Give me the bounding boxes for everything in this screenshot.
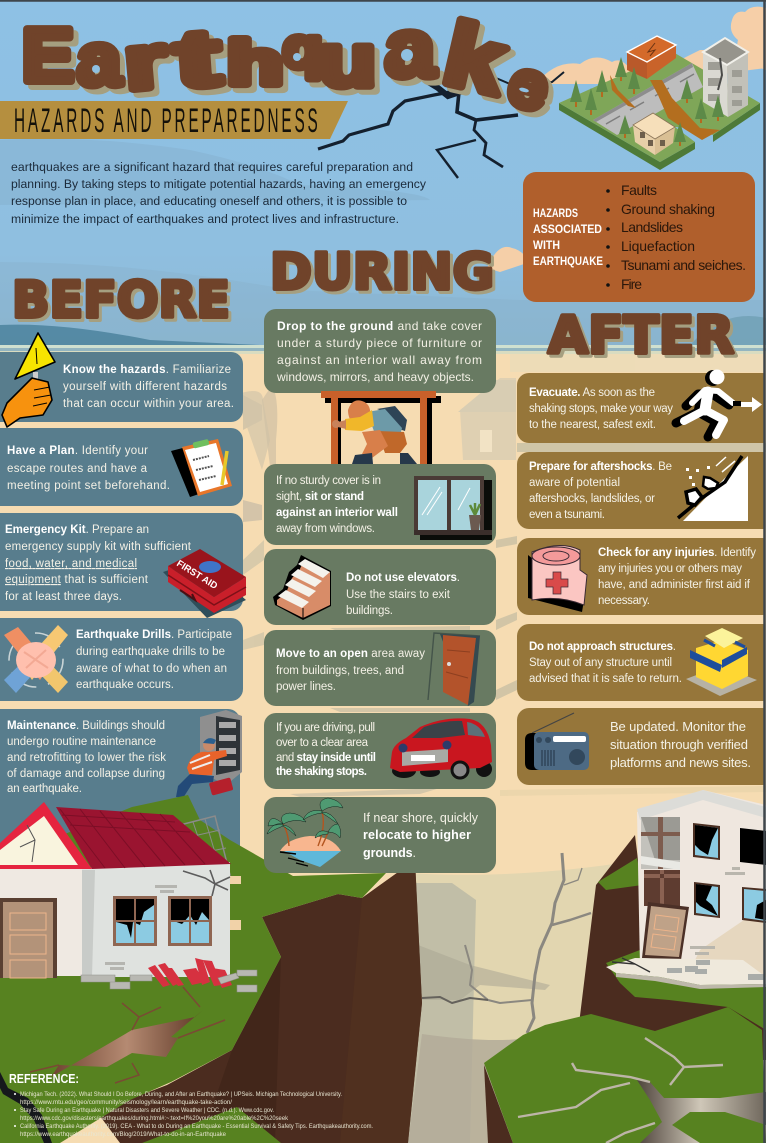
panel: earthquake drills [0, 618, 243, 701]
panel: check for any injuries: have, and administer first aid if [598, 579, 751, 591]
panel: emergency kit: food, water, and medical [5, 558, 137, 570]
heading: after: AFTER [548, 306, 734, 366]
icon: isometric earthquake city [559, 36, 760, 170]
broken windows [693, 823, 766, 923]
title letter counters [92, 49, 529, 93]
icon: yellow isometric building [686, 628, 757, 696]
canyon wall [405, 860, 640, 1143]
panel: be updated: situation through verified [610, 737, 748, 752]
green mound right [484, 1007, 766, 1143]
hazard list [606, 182, 746, 292]
panel: if you are driving [264, 713, 496, 789]
heading: Earthquake title: h [227, 29, 283, 98]
panel: if you are driving: and stay inside until [276, 752, 376, 764]
panel: if you are driving: the shaking stops. [276, 766, 367, 778]
heading: Earthquake title: a [77, 18, 122, 101]
trees [575, 75, 719, 146]
panel: prepare for aftershocks: Prepare for aftershocks. Be [529, 461, 672, 473]
right upper green [598, 858, 642, 890]
left brown cliff [97, 860, 422, 1143]
hazard list: Faults [621, 182, 657, 198]
heading: Earthquake title: u [319, 19, 376, 102]
panel: sit or stand against an interior wall [264, 464, 496, 545]
panel: hazards associated with earthquake: ASSOCIATED [533, 224, 602, 236]
panel: have a plan: Have a Plan. Identify your [7, 445, 148, 457]
wall cracks [183, 870, 230, 896]
panel: have a plan: escape routes and have a [7, 463, 148, 475]
icon: bandage roll [528, 545, 587, 612]
reference list: https://www.mtu.edu/geo/community/seismology/learn/earthquake-take-action/ [20, 1100, 232, 1106]
icon: clipboard checklist [171, 439, 232, 497]
roof [56, 807, 231, 869]
icon: staircase [273, 555, 331, 620]
panel: before - maintenance [0, 709, 242, 859]
panel: move to an open area: from buildings, trees, and [276, 665, 404, 677]
icon: first aid kit: FIRST AID [174, 558, 219, 592]
reference list: Stay Safe During an Earthquake | Natural Disasters and Severe Weather | CDC. (n.d.). Www.cdc.gov. [20, 1108, 274, 1114]
panel: know the hazards: that can occur within your area. [63, 398, 234, 410]
panel: emergency kit: emergency supply kit with sufficient [5, 541, 192, 553]
panel: if you are driving: If you are driving, pull [276, 722, 375, 734]
panel: earthquake drills: during earthquake drills to be [76, 646, 225, 658]
icon: person under table [321, 391, 441, 464]
panel: evacuate: Evacuate. As soon as the [529, 387, 655, 399]
hazard list: Ground shaking [621, 201, 715, 217]
icon: red car [390, 718, 492, 778]
panel: earthquake drills: earthquake occurs. [76, 679, 174, 691]
panel: check for any injuries: necessary. [598, 595, 650, 607]
panel: emergency kit [0, 513, 246, 618]
background: sky, clouds and horizon [0, 0, 766, 874]
hazard list: Tsunami and seiches. [621, 257, 746, 273]
panel: sit or stand against an interior wall: If no sturdy cover is in [276, 475, 381, 487]
panel: do not approach structures: Do not approach structures. [529, 641, 676, 653]
panel: evacuate: shaking stops, make your way [529, 403, 673, 415]
panel: drop to the ground: windows, mirrors, and heavy objects. [276, 370, 474, 384]
panel: have a plan: meeting point set beforehand. [7, 480, 170, 492]
icon: window [414, 476, 492, 540]
panel: do not use elevators: Use the stairs to exit [346, 589, 451, 601]
lower green patch [142, 1107, 281, 1143]
panel: do not approach structures: Stay out of any structure until [529, 657, 672, 669]
bricks [81, 970, 257, 992]
panel: know the hazards: Know the hazards. Familiarize [63, 364, 231, 376]
panel: before - maintenance: an earthquake. [7, 783, 82, 795]
panel: sit or stand against an interior wall: against an interior wall [276, 507, 398, 519]
reference list [14, 1092, 373, 1138]
ground crack left [30, 987, 225, 1083]
icon: warning sign in hand [2, 333, 55, 427]
panel: drop to the ground: against an interior wall away from [277, 353, 482, 367]
right brown cliff [579, 835, 766, 1060]
panel: if near shore: If near shore, quickly [363, 811, 479, 825]
panel: be updated [517, 708, 764, 785]
windows [113, 896, 212, 946]
panel: move to an open area [264, 630, 496, 706]
panel: if near shore: grounds. [363, 846, 416, 860]
shadows on canyon wall [418, 945, 550, 1000]
icon: radio [525, 713, 589, 770]
background: faded beach buildings and shadows [235, 354, 766, 797]
panel: move to an open area: Move to an open area away [276, 648, 425, 660]
hazard list: Landslides [621, 219, 683, 235]
reference heading: REFERENCE: [9, 1072, 79, 1086]
panel: hazards associated with earthquake: EARTHQUAKE [533, 256, 603, 268]
hazard list: Liquefaction [621, 238, 695, 254]
panel: do not approach structures: advised that it is safe to return. [529, 673, 682, 685]
icon: first aid kit [163, 549, 246, 618]
icon: palm island [267, 798, 343, 867]
heading: Earthquake title: a [385, 3, 437, 94]
panel: hazards associated with earthquake [523, 172, 755, 302]
panel: have a plan [0, 428, 243, 506]
door [0, 898, 57, 978]
panel: drop to the ground [264, 309, 496, 393]
panel: emergency kit: Emergency Kit. Prepare an [5, 524, 149, 536]
panel: do not approach structures [517, 624, 764, 701]
panel: do not use elevators: Do not use elevators. [346, 572, 460, 584]
reference list: Michigan Tech. (2022). What Should I Do Before, During, and After an Earthquake? | UPSeis. Michigan Technological University. [20, 1092, 342, 1098]
broken floor slab [606, 958, 766, 985]
debris wall tabs [230, 876, 241, 930]
reference list: California Earthquake Authority. (2019). CEA - What to do During an Earthquake - Essential Survival & Safety Tips. Earthquakeauthority.com. [20, 1124, 373, 1130]
heading: Earthquake title: r [121, 18, 170, 107]
panel: earthquake drills: aware of what to do when an [76, 663, 227, 675]
reference list: https://www.earthquakeauthority.com/Blog/2019/What-to-do-in-an-Earthquake [20, 1132, 227, 1138]
panel: before - maintenance: and retrofitting to lower the risk [7, 752, 166, 764]
panel: evacuate: to the nearest, safest exit. [529, 419, 656, 431]
panel: know the hazards: yourself with different hazards [63, 381, 227, 393]
illustration: cracked white building [606, 790, 766, 989]
panel: do not use elevators [264, 549, 496, 625]
panel: prepare for aftershocks: aftershocks, landslides, or [529, 493, 655, 505]
heading: Earthquake title [22, 3, 557, 125]
heading: Earthquake title: t [172, 12, 223, 104]
panel: move to an open area: power lines. [276, 681, 336, 693]
panel: drop to the ground: under a sturdy piece of furniture or [277, 336, 482, 350]
panel: check for any injuries [517, 538, 764, 615]
black crack bottom-left [0, 1072, 52, 1143]
panel: sit or stand against an interior wall: sight, sit or stand [276, 491, 364, 503]
panel: check for any injuries: Check for any injuries. Identify [598, 547, 756, 559]
panel: prepare for aftershocks [517, 452, 764, 529]
heading: during: DURING [270, 243, 494, 301]
fallen roof tiles [148, 958, 232, 988]
panel: hazards associated with earthquake: WITH [533, 240, 560, 252]
brown strip by mound [484, 1065, 513, 1143]
text block: references [9, 1072, 373, 1138]
panel: sit or stand against an interior wall: away from windows. [276, 523, 375, 535]
heading: Earthquake title: E [22, 13, 74, 97]
heading: Earthquake title: q [283, 16, 322, 79]
beige cracked building [633, 113, 675, 155]
panel: if near shore: relocate to higher [363, 828, 471, 842]
panel: emergency kit: for at least three days. [5, 591, 122, 603]
leaning door [642, 902, 689, 960]
panel: before - maintenance: of damage and collapse during [7, 768, 165, 780]
heading: before: BEFORE [12, 271, 230, 329]
icon: open door [428, 633, 480, 706]
banner: hazards and preparedness: HAZARDS AND PREPAREDNESS [14, 101, 318, 140]
icon: running person with arrow [676, 370, 762, 437]
text block: introduction [11, 160, 427, 226]
panel: if near shore [264, 797, 496, 873]
illustration: broken ground and cliffs [0, 795, 766, 1143]
text block: introduction: response plan in place, and educating oneself and others, it is possible to [11, 194, 407, 208]
illustration: damaged house [0, 802, 257, 992]
panel: be updated: platforms and news sites. [610, 755, 751, 770]
text block: introduction: earthquakes are a significant hazard that requires careful preparation and [11, 160, 413, 174]
panel: if you are driving: over to a clear area [276, 737, 369, 749]
text block: introduction: minimize the impact of earthquakes and protect lives and infrastructure. [11, 212, 399, 226]
text block: introduction: planning. By taking steps to mitigate potential hazards, having an emergency [11, 177, 427, 191]
heading: Earthquake title: k [435, 4, 516, 115]
panel: before - maintenance: Maintenance. Buildings should [7, 720, 165, 732]
grey tower [703, 38, 748, 117]
orange cracked building [627, 36, 676, 79]
panel: before - maintenance: undergo routine maintenance [7, 736, 156, 748]
panel: do not use elevators: buildings. [346, 605, 393, 617]
house walls [0, 868, 82, 976]
panel: emergency kit: equipment that is sufficient [5, 574, 149, 586]
left green hill [0, 795, 386, 1143]
lattice [180, 816, 230, 880]
reference list: https://www.cdc.gov/disasters/earthquakes/during.html#:~:text=If%20you%20are%20able%2C%20seek [20, 1116, 289, 1122]
canyon floor shadow [408, 883, 476, 1143]
icon: landslide [678, 456, 748, 521]
panel: be updated: Be updated. Monitor the [610, 719, 746, 734]
icon: electrician at panel [176, 710, 242, 798]
icon: ground fissure across title [318, 72, 564, 178]
canyon lower shade [408, 1034, 540, 1143]
panel: earthquake drills: Earthquake Drills. Participate [76, 629, 232, 641]
panel: know the hazards [0, 333, 243, 427]
panel: drop to the ground: Drop to the ground and take cover [277, 319, 482, 333]
hazard list: Fire [621, 276, 642, 292]
icon: joined hands [4, 625, 68, 693]
panel: evacuate [517, 370, 764, 443]
canyon cracks [422, 853, 591, 1033]
heading: Earthquake title: e [501, 44, 557, 125]
panel: hazards associated with earthquake: HAZARDS [533, 208, 578, 220]
panel: prepare for aftershocks: even a tsunami. [529, 509, 605, 521]
mound cracks [518, 1038, 766, 1143]
panel: check for any injuries: any injuries you or others may [598, 563, 742, 575]
panel: prepare for aftershocks: aware of potential [529, 477, 620, 489]
